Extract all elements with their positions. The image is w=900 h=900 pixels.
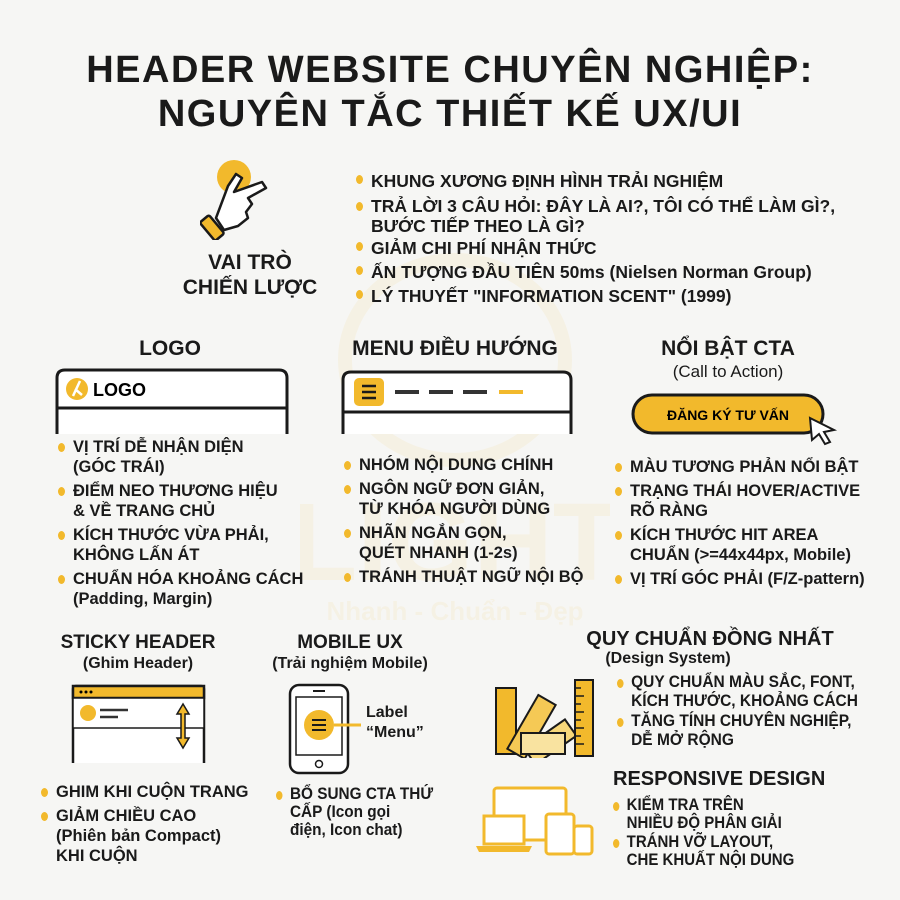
heading: quy chuan: QUY CHUẨN ĐỒNG NHẤT xyxy=(586,628,834,650)
heading: vai tro chien luoc: CHIẾN LƯỢC xyxy=(183,276,317,299)
label: menu xyxy=(366,704,424,741)
bullets: responsive: KIỂM TRA TRÊN xyxy=(627,796,744,814)
bullets: vai tro xyxy=(356,171,835,306)
bullets: cta: RÕ RÀNG xyxy=(630,502,708,520)
bullets: cta: MÀU TƯƠNG PHẢN NỔI BẬT xyxy=(630,458,859,476)
bullets: logo: KÍCH THƯỚC VỪA PHẢI, xyxy=(73,526,269,544)
bullets: menu: TRÁNH THUẬT NGỮ NỘI BỘ xyxy=(359,568,584,586)
bullets: mobile: CẤP (Icon gọi xyxy=(290,803,390,821)
title: NGUYÊN TẮC THIẾT KẾ UX/UI xyxy=(158,93,742,135)
bullets: logo: & VỀ TRANG CHỦ xyxy=(73,502,215,520)
bullets: vai tro: GIẢM CHI PHÍ NHẬN THỨC xyxy=(371,238,596,258)
bullets: sticky: KHI CUỘN xyxy=(56,847,138,865)
bullets: cta xyxy=(615,457,865,588)
heading: vai tro chien luoc: VAI TRÒ xyxy=(208,251,292,274)
bullets: menu: NHÓM NỘI DUNG CHÍNH xyxy=(359,456,553,474)
label: menu: “Menu” xyxy=(366,724,424,741)
bullets: design system: TĂNG TÍNH CHUYÊN NGHIỆP, xyxy=(631,712,851,730)
bullets: menu xyxy=(344,454,584,586)
bullets: responsive: CHE KHUẤT NỘI DUNG xyxy=(627,851,794,869)
bullets: mobile xyxy=(276,784,434,839)
bullets: sticky: GIẢM CHIỀU CAO xyxy=(56,807,196,825)
icon: devices xyxy=(476,786,594,856)
bullets: menu: NHÃN NGẮN GỌN, xyxy=(359,524,507,542)
icon: menu header xyxy=(342,370,572,434)
icon: logo header: LOGO xyxy=(93,380,146,400)
title xyxy=(86,48,814,135)
subtitle: mobile: (Trải nghiệm Mobile) xyxy=(272,655,428,672)
bullets: design system: KÍCH THƯỚC, KHOẢNG CÁCH xyxy=(631,692,858,710)
bullets: logo: (GÓC TRÁI) xyxy=(73,458,165,476)
watermark: Nhanh - Chuẩn - Đẹp xyxy=(326,596,584,626)
bullets: menu: NGÔN NGỮ ĐƠN GIẢN, xyxy=(359,480,544,498)
bullets: vai tro: KHUNG XƯƠNG ĐỊNH HÌNH TRẢI NGHIỆM xyxy=(371,171,723,191)
bullets: cta: VỊ TRÍ GÓC PHẢI (F/Z-pattern) xyxy=(630,570,865,588)
bullets: mobile: điện, Icon chat) xyxy=(290,821,402,839)
bullets: design system: QUY CHUẨN MÀU SẮC, FONT, xyxy=(631,673,855,691)
label: menu: Label xyxy=(366,704,408,721)
bullets: vai tro: BƯỚC TIẾP THEO LÀ GÌ? xyxy=(371,216,585,236)
bullets: responsive: NHIỀU ĐỘ PHÂN GIẢI xyxy=(627,814,782,832)
bullets: logo: KHÔNG LẤN ÁT xyxy=(73,546,200,564)
bullets: vai tro: LÝ THUYẾT "INFORMATION SCENT" (1999) xyxy=(371,286,731,306)
bullets: logo: ĐIỂM NEO THƯƠNG HIỆU xyxy=(73,482,278,500)
bullets: logo: CHUẨN HÓA KHOẢNG CÁCH xyxy=(73,570,303,588)
icon: cta button xyxy=(632,394,837,446)
bullets: cta: KÍCH THƯỚC HIT AREA xyxy=(630,526,818,544)
icon: logo header xyxy=(56,368,288,434)
heading: sticky header: STICKY HEADER xyxy=(61,632,215,653)
bullets: vai tro: ẤN TƯỢNG ĐẦU TIÊN 50ms (Nielsen Norman Group) xyxy=(371,262,812,282)
bullets: menu: QUÉT NHANH (1-2s) xyxy=(359,544,518,562)
heading: responsive: RESPONSIVE DESIGN xyxy=(613,768,825,790)
heading: mobile ux: MOBILE UX xyxy=(297,632,403,653)
bullets: menu: TỪ KHÓA NGƯỜI DÙNG xyxy=(359,500,550,518)
heading: vai tro chien luoc xyxy=(183,250,317,299)
watermark xyxy=(300,253,610,626)
heading: cta: NỔI BẬT CTA xyxy=(661,337,795,360)
bullets: design system xyxy=(617,672,858,749)
bullets: sticky xyxy=(41,782,248,865)
bullets: logo xyxy=(58,437,303,608)
bullets: logo: (Padding, Margin) xyxy=(73,590,212,608)
heading: logo: LOGO xyxy=(139,337,201,360)
bullets: responsive xyxy=(613,795,794,869)
bullets: design system: DỄ MỞ RỘNG xyxy=(631,731,734,749)
bullets: logo: VỊ TRÍ DỄ NHẬN DIỆN xyxy=(73,438,244,456)
heading: menu: MENU ĐIỀU HƯỚNG xyxy=(352,337,558,360)
icon: cta button: ĐĂNG KÝ TƯ VẤN xyxy=(667,406,789,423)
bullets: cta: CHUẨN (>=44x44px, Mobile) xyxy=(630,546,851,564)
bullets: sticky: GHIM KHI CUỘN TRANG xyxy=(56,783,248,801)
bullets: responsive: TRÁNH VỠ LAYOUT, xyxy=(627,833,773,851)
bullets: sticky: (Phiên bản Compact) xyxy=(56,827,221,845)
bullets: mobile: BỔ SUNG CTA THỨ xyxy=(290,785,433,803)
subtitle: cta: (Call to Action) xyxy=(673,362,783,381)
icon: sticky header xyxy=(72,684,206,763)
icon: swatches xyxy=(495,679,594,758)
bullets: vai tro: TRẢ LỜI 3 CÂU HỎI: ĐÂY LÀ AI?, TÔI CÓ THỂ LÀM GÌ?, xyxy=(371,196,835,216)
subtitle: design system: (Design System) xyxy=(605,650,731,667)
icon: phone xyxy=(288,684,361,774)
title: HEADER WEBSITE CHUYÊN NGHIỆP: xyxy=(86,49,814,91)
icon: pointing hand xyxy=(200,160,268,240)
bullets: cta: TRẠNG THÁI HOVER/ACTIVE xyxy=(630,482,860,500)
subtitle: sticky: (Ghim Header) xyxy=(83,655,193,672)
